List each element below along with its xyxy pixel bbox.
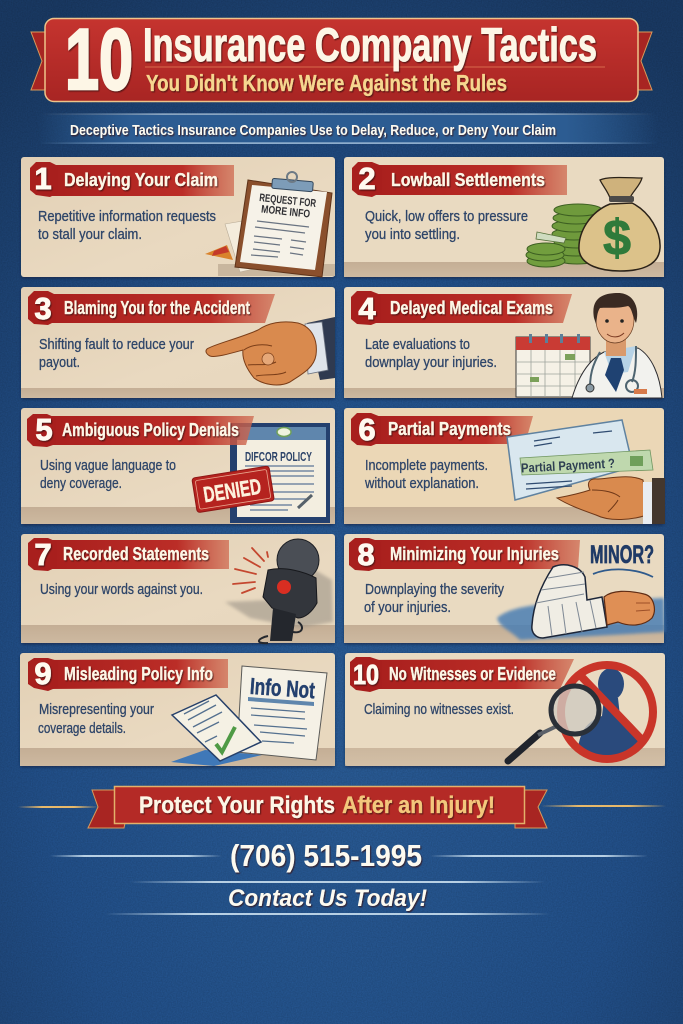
icon: bandaged arm: [497, 565, 665, 640]
ribbon 3: Blaming You for the Accident: [64, 298, 250, 318]
phone number: (706) 515-1995: [230, 838, 422, 873]
panel: 3 Blaming You for the Accident: [21, 287, 335, 398]
stamp: denied: DENIED: [202, 474, 263, 507]
ribbon 9: 9: [34, 656, 52, 691]
text 8: Downplaying the severity: [365, 582, 505, 598]
ribbon 1: 1: [34, 161, 52, 196]
ribbon 5: 5: [35, 412, 53, 447]
panel: 2 Lowball Settlements: [344, 157, 664, 277]
text 4: [365, 337, 497, 371]
text 3: [39, 337, 194, 371]
ribbon 5: [27, 412, 254, 447]
text 1: Repetitive information requests: [38, 209, 216, 225]
ribbon 10: [350, 657, 574, 692]
icon: partial payment check in hand: Partial Payment ?: [521, 456, 615, 475]
ribbon 4: [351, 291, 572, 326]
icon: pointing hand: [206, 317, 335, 385]
text 3: Shifting fault to reduce your: [39, 337, 194, 353]
ribbon 7: Recorded Statements: [63, 544, 209, 564]
icon: calendar: [516, 334, 590, 397]
text 5: [40, 458, 176, 492]
ribbon 8: [349, 537, 580, 572]
text 8: of your injuries.: [364, 600, 451, 616]
ribbon 4: Delayed Medical Exams: [390, 298, 553, 318]
text 6: [364, 458, 488, 492]
icon: clipboard request for more info: [205, 172, 335, 277]
icon: clipboard request for more info: REQUEST FOR: [259, 192, 317, 210]
ribbon 7: 7: [34, 537, 52, 572]
ribbon 6: [351, 412, 533, 447]
ribbon 6: 6: [358, 412, 376, 447]
label: minor: [590, 541, 654, 577]
icon: partial payment check in hand: [507, 420, 665, 524]
ribbon 9: [28, 656, 228, 691]
icon: money bag and coins: $: [603, 210, 631, 266]
text 1: to stall your claim.: [38, 227, 142, 243]
ribbon 3: 3: [34, 291, 52, 326]
text 1: [38, 209, 216, 243]
icon: info not document: Info Not: [249, 673, 316, 703]
footer headline gold: After an Injury!: [342, 792, 495, 819]
ribbon 1: Delaying Your Claim: [64, 170, 218, 190]
panel: 10 No Witnesses or Evidence: [345, 653, 665, 766]
icon: microphone: [225, 539, 333, 643]
ribbon 5: Ambiguous Policy Denials: [62, 420, 239, 440]
tagline band: [38, 114, 658, 144]
icon: money bag and coins: [526, 178, 660, 271]
ribbon 7: [28, 537, 229, 572]
text 2: Quick, low offers to pressure: [365, 209, 528, 225]
ribbon 10: 10: [353, 659, 379, 690]
text 6: Incomplete payments.: [365, 458, 488, 474]
icon: magnifying glass: [508, 686, 599, 761]
text 9: [38, 702, 154, 737]
title number: 10: [65, 12, 133, 108]
title banner: [31, 12, 652, 108]
text 4: downplay your injuries.: [365, 355, 497, 371]
text 10: Claiming no witnesses exist.: [364, 702, 514, 718]
text 6: without explanation.: [364, 476, 479, 492]
text 2: you into settling.: [365, 227, 460, 243]
icon: policy document on clipboard: DIFCOR POLICY: [245, 449, 312, 464]
text 5: deny coverage.: [40, 476, 122, 492]
panel: 8 Minimizing Your Injuries: [344, 534, 665, 643]
text 2: [365, 209, 528, 243]
text 8: [364, 582, 505, 616]
icon: info not document: [237, 666, 327, 760]
ribbon 9: Misleading Policy Info: [64, 664, 213, 684]
footer headline white: Protect Your Rights: [139, 792, 335, 819]
ribbon 8: 8: [357, 537, 375, 572]
panel: 7 Recorded Statements: [21, 534, 335, 643]
icon: booklet with check: [171, 695, 262, 766]
subtitle: You Didn't Know Were Against the Rules: [146, 70, 507, 96]
ribbon 2: Lowball Settlements: [391, 170, 545, 190]
icon: clipboard request for more info: MORE INFO: [261, 204, 311, 221]
ribbon 3: [28, 291, 275, 326]
text 7: Using your words against you.: [40, 582, 203, 598]
ribbon 2: [352, 161, 567, 197]
tagline band: Deceptive Tactics Insurance Companies Use to Delay, Reduce, or Deny Your Claim: [70, 122, 556, 139]
panel: 5 Ambiguous Policy Denials: [21, 408, 335, 524]
text 4: Late evaluations to: [365, 337, 470, 353]
text 3: payout.: [39, 355, 80, 371]
ribbon 8: Minimizing Your Injuries: [390, 544, 559, 564]
ribbon 10: No Witnesses or Evidence: [389, 664, 556, 684]
icon: doctor: [572, 293, 662, 398]
ribbon 6: Partial Payments: [388, 419, 511, 439]
panel: 4 Delayed Medical Exams: [344, 287, 664, 398]
footer banner: [18, 786, 666, 828]
icon: policy document on clipboard: [230, 423, 330, 523]
text 9: Misrepresenting your: [39, 702, 154, 718]
stamp: denied: [192, 466, 274, 513]
ribbon 4: 4: [358, 291, 376, 326]
call to action: Contact Us Today!: [228, 885, 427, 912]
panel: 6 Partial Payments: [344, 408, 665, 524]
panel: 1 Delaying Your Claim: [21, 157, 335, 277]
text 5: Using vague language to: [40, 458, 176, 474]
panel: 9 Misleading Policy Info: [20, 653, 335, 766]
ribbon 1: [30, 161, 234, 197]
ribbon 2: 2: [358, 161, 376, 196]
icon: no witness silhouette: [561, 665, 653, 760]
text 9: coverage details.: [38, 721, 126, 737]
